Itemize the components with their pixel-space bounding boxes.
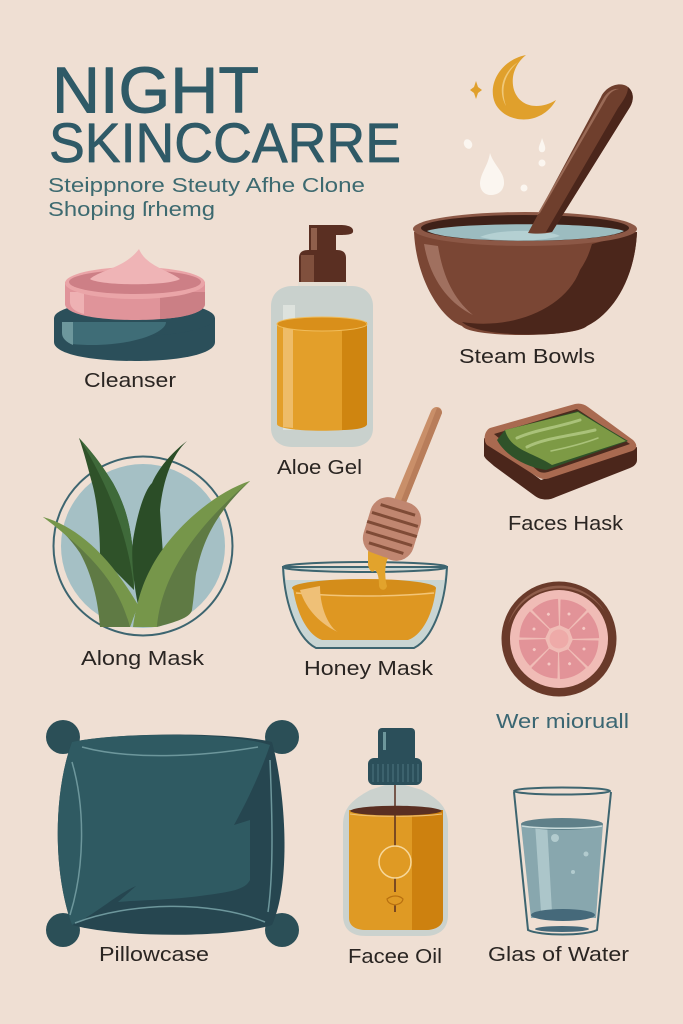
label: glass of water: Glas of Water [488, 944, 629, 966]
subtitle [48, 175, 365, 221]
dark pillow body [58, 734, 285, 935]
segments [512, 592, 606, 686]
icon: pump bottle [271, 225, 373, 447]
label: pillowcase: Pillowcase [99, 944, 209, 966]
honey drip [368, 551, 388, 590]
label: wer mioruall: Wer mioruall [496, 711, 629, 733]
glass body [271, 286, 373, 447]
spoon [528, 84, 633, 234]
water [427, 224, 624, 241]
dropper line and emblem [394, 785, 396, 912]
icon: moon and sparkle [470, 55, 556, 120]
icon: citrus slice [502, 582, 616, 696]
title: NIGHT [52, 54, 259, 126]
glass [343, 785, 448, 936]
title: SKINCCARRE [49, 111, 401, 174]
corner tufts [46, 720, 299, 947]
bowl body [414, 232, 637, 335]
dark leaves [79, 438, 134, 590]
teal base [54, 318, 215, 361]
pink lid [65, 282, 205, 320]
label: cleanser: Cleanser [84, 370, 176, 392]
water [521, 820, 603, 918]
icon: pillow [46, 720, 299, 947]
icon: face oil bottle [343, 728, 448, 936]
oil [349, 810, 443, 930]
cap [378, 728, 415, 762]
icon: water drops [462, 138, 546, 195]
label: face oil: Facee Oil [348, 946, 442, 968]
pump [309, 225, 353, 252]
subtitle: Shoping ſrhemg [48, 199, 215, 221]
light leaves [43, 517, 138, 627]
label: along mask: Along Mask [81, 648, 205, 670]
label: aloe gel: Aloe Gel [277, 457, 362, 479]
icon: honey bowl with dipper [283, 407, 447, 648]
dipper head [358, 493, 426, 565]
cream [90, 249, 180, 284]
glass bowl [283, 567, 447, 648]
icon: green mask tray [484, 404, 637, 500]
glass outline [514, 792, 611, 934]
label: faces hask: Faces Hask [508, 513, 624, 535]
light pillow face [58, 735, 270, 925]
icon: cleanser jar [54, 249, 215, 361]
icon: steam bowl [413, 84, 637, 335]
dipper handle [394, 407, 442, 503]
liquid [277, 317, 367, 431]
icon: aloe [43, 438, 250, 636]
subtitle: Steippnore Steuty Afhe Clone [48, 175, 365, 197]
label: steam bowls: Steam Bowls [459, 346, 595, 368]
label: honey mask: Honey Mask [304, 658, 434, 680]
seam highlights [70, 747, 272, 923]
icon: glass of water [514, 788, 611, 934]
title [49, 54, 401, 174]
